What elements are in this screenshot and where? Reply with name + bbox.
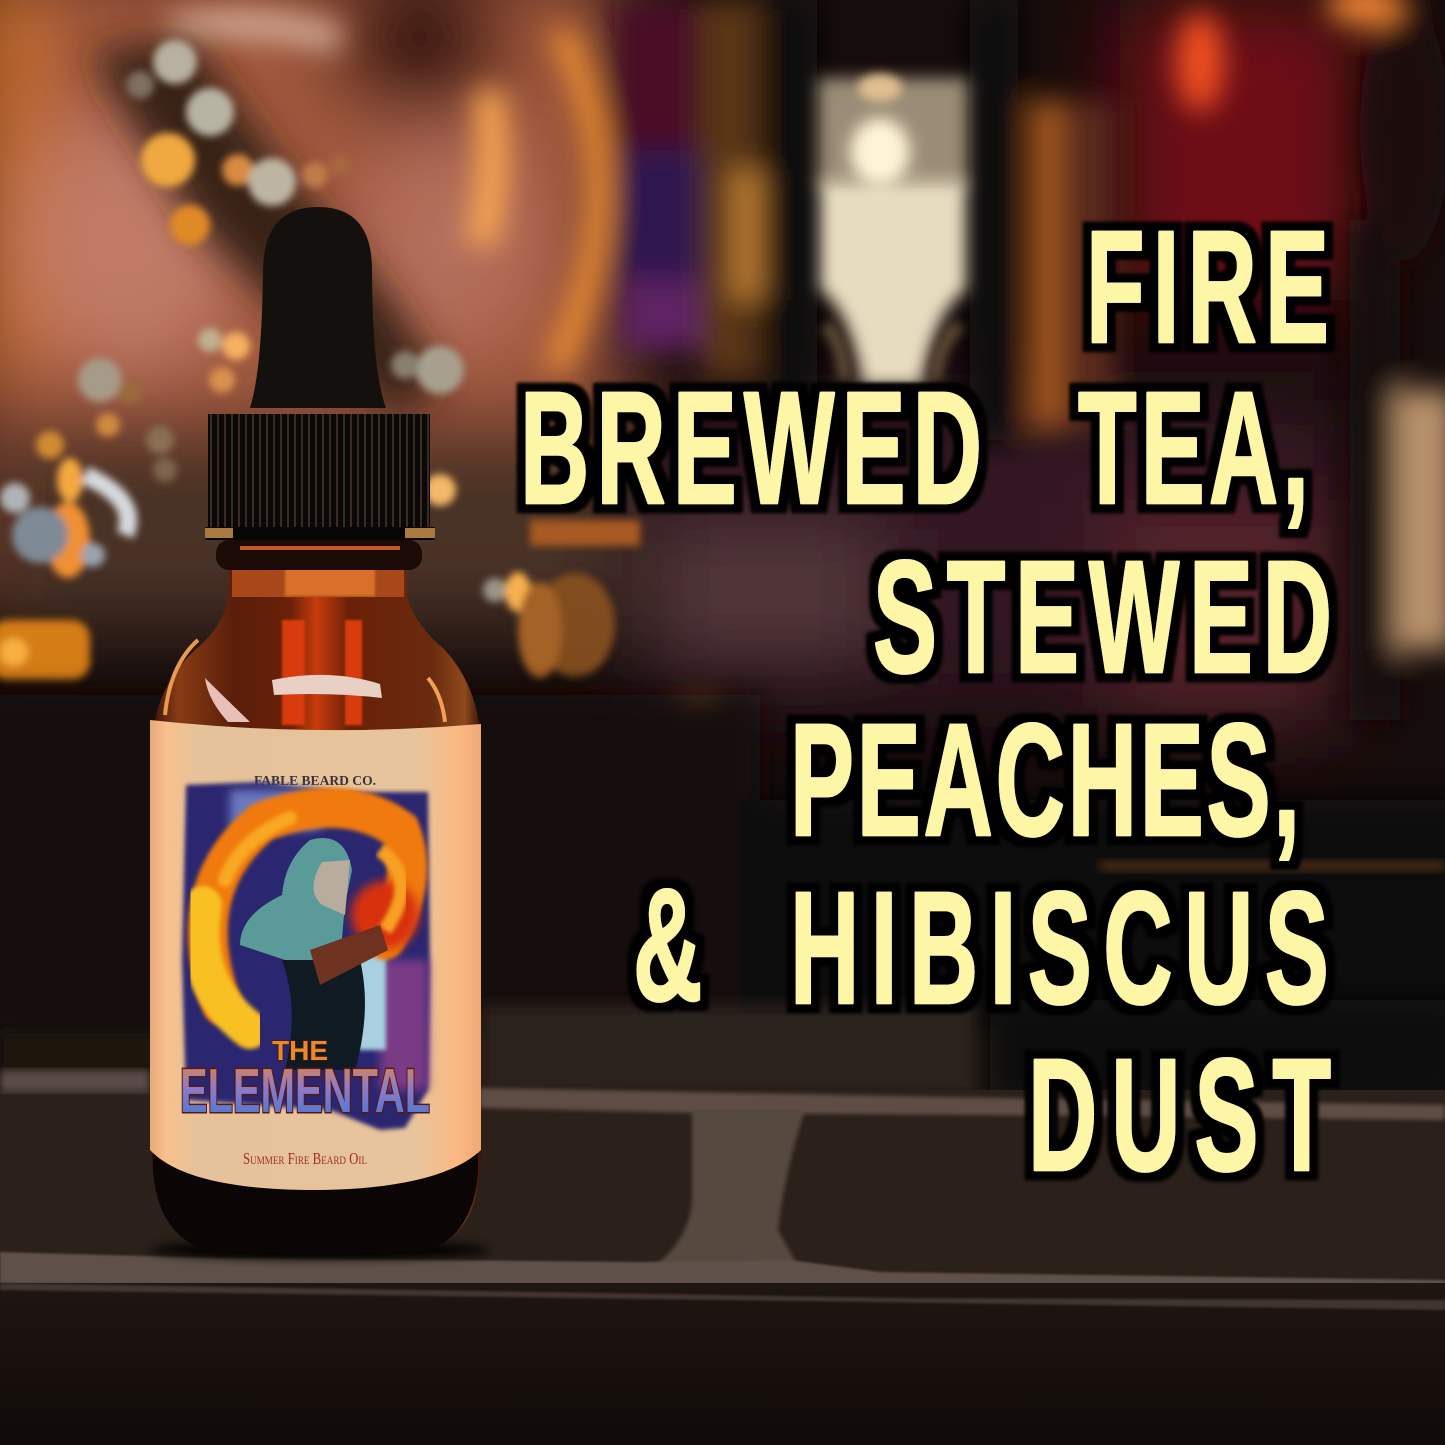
dropper bulb (250, 207, 386, 408)
stone ledge (0, 1000, 1445, 1445)
word: BREWED: BREWED (520, 359, 982, 537)
paper label (150, 720, 481, 1190)
line: STEWED: STEWED (873, 528, 1332, 706)
background columns and colour bands (170, 0, 1445, 810)
label subtitle: Summer Fire Beard Oil (243, 1149, 367, 1168)
label artwork (182, 782, 430, 1130)
background: candle in lantern (818, 74, 968, 385)
background: silver and gold bokeh (0, 40, 640, 680)
label title: ELEMENTAL (180, 1057, 430, 1126)
neck ring (216, 540, 422, 570)
glass neck highlight (232, 565, 404, 597)
line: FIRE: FIRE (1086, 198, 1329, 376)
word: &: & (633, 856, 702, 1034)
word: HIBISCUS: HIBISCUS (790, 859, 1329, 1037)
label brand: FABLE BEARD CO. (254, 774, 376, 789)
word: TEA,: TEA, (1078, 359, 1309, 537)
line: PEACHES,: PEACHES, (790, 691, 1300, 869)
glass base (153, 1140, 478, 1253)
dropper cap (205, 414, 435, 540)
flame ring (208, 808, 407, 1005)
line: DUST: DUST (1028, 1026, 1331, 1204)
amber glass body (152, 555, 481, 1252)
wizard (282, 960, 365, 1070)
label small title: THE (272, 1035, 328, 1066)
background: dark counter (0, 695, 1445, 1090)
headline text (520, 198, 1332, 1204)
bottle (150, 207, 490, 1259)
background glow washes (0, 0, 1360, 720)
shoulder reflections (165, 640, 445, 722)
bottle shadow (150, 1241, 490, 1259)
red reflection streaks (282, 620, 362, 725)
